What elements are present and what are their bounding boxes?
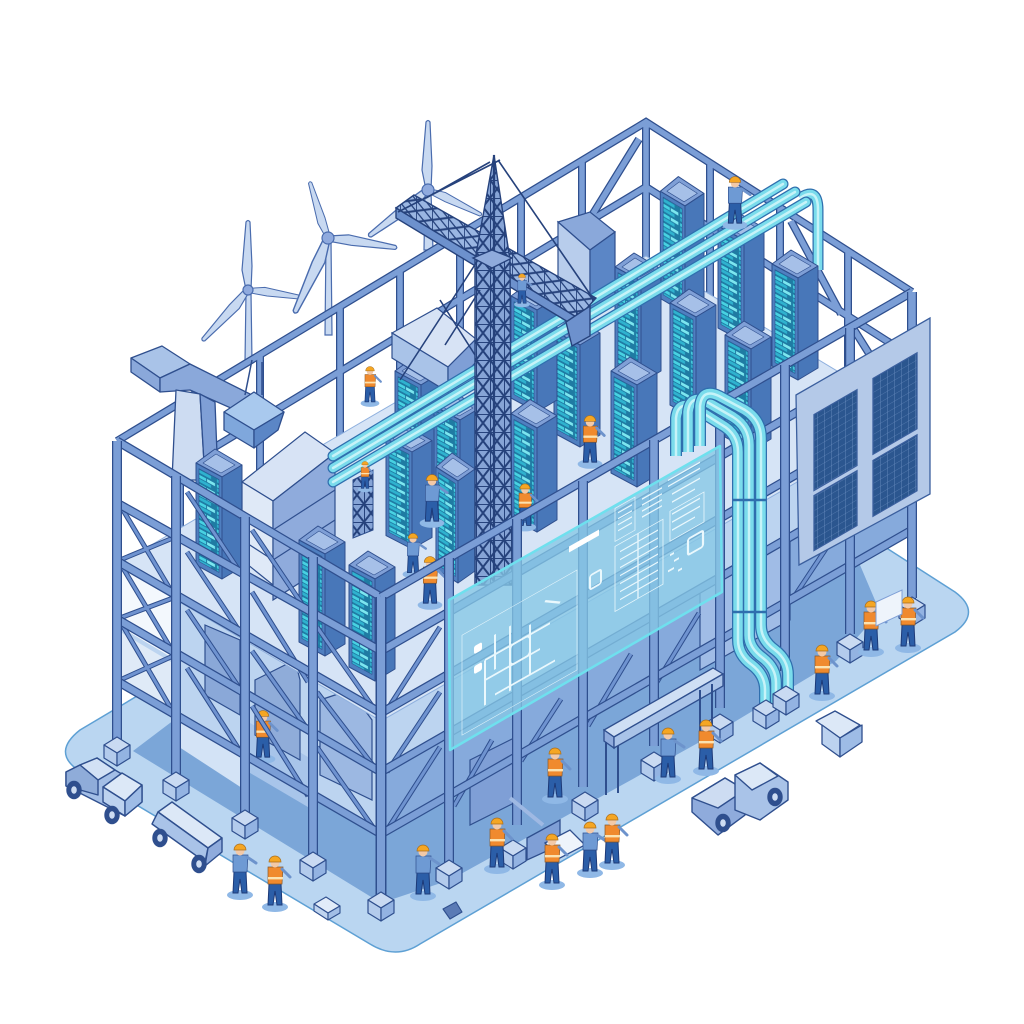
jib bbox=[396, 195, 596, 346]
lower equipment bbox=[205, 540, 790, 825]
pipe footings bbox=[753, 686, 799, 729]
robotic arm and workstation bbox=[500, 798, 585, 869]
left wall frame bbox=[117, 441, 381, 863]
schematic circuit bbox=[485, 593, 560, 705]
right wall diagonals bbox=[387, 520, 845, 830]
turbine 3 bbox=[366, 120, 484, 250]
equipment box: left bbox=[242, 432, 335, 600]
vertical coolant pipes bbox=[676, 394, 788, 714]
upper floor bbox=[117, 256, 912, 721]
worker: lower floor bbox=[251, 711, 277, 764]
holographic blueprint panel bbox=[449, 446, 722, 750]
horizontal coolant pipes bbox=[333, 184, 806, 482]
truck: flatbed bbox=[152, 802, 222, 872]
equipment box: upper bbox=[392, 308, 476, 392]
crane mast and jib bbox=[396, 155, 596, 585]
turbine 1 bbox=[200, 220, 305, 362]
tall unit behind crane bbox=[558, 212, 615, 320]
hanging container bbox=[224, 392, 284, 448]
solar panel array bbox=[796, 318, 930, 565]
data lists bbox=[615, 519, 663, 611]
supply cart bbox=[816, 711, 862, 757]
lower levels bbox=[117, 416, 912, 837]
right wall frame bbox=[381, 292, 912, 903]
pickup truck bbox=[692, 763, 788, 835]
small crates bbox=[314, 897, 462, 920]
left wall diagonals bbox=[120, 492, 375, 830]
blueprint graphics bbox=[462, 458, 704, 735]
server racks: back rows bbox=[386, 177, 818, 549]
column footings bbox=[104, 597, 925, 921]
ground workers bbox=[227, 597, 923, 912]
back frame bbox=[117, 122, 912, 690]
scaffold tower small bbox=[353, 470, 373, 538]
wind turbines bbox=[200, 120, 484, 362]
worker group: upper floor bbox=[358, 177, 750, 610]
held blueprint sheet bbox=[876, 590, 902, 626]
truck: left bbox=[66, 758, 142, 824]
loading bench bbox=[604, 668, 723, 795]
server racks: left front bbox=[299, 526, 395, 681]
mast bbox=[473, 155, 512, 585]
right wall beams bbox=[381, 292, 912, 834]
cables bbox=[398, 160, 594, 380]
coolant pipe bend behind racks bbox=[800, 194, 818, 270]
server racks: left group bbox=[196, 449, 242, 579]
ground plate bbox=[65, 399, 968, 952]
right wall columns bbox=[449, 292, 912, 864]
left wall beams bbox=[117, 441, 381, 834]
gantry crane: left bbox=[131, 346, 284, 480]
building shadow bbox=[133, 420, 880, 903]
server racks: beside crane mast bbox=[436, 399, 557, 583]
left wall columns bbox=[117, 441, 313, 863]
front corner column bbox=[376, 597, 386, 903]
turbine 2 bbox=[290, 181, 398, 335]
